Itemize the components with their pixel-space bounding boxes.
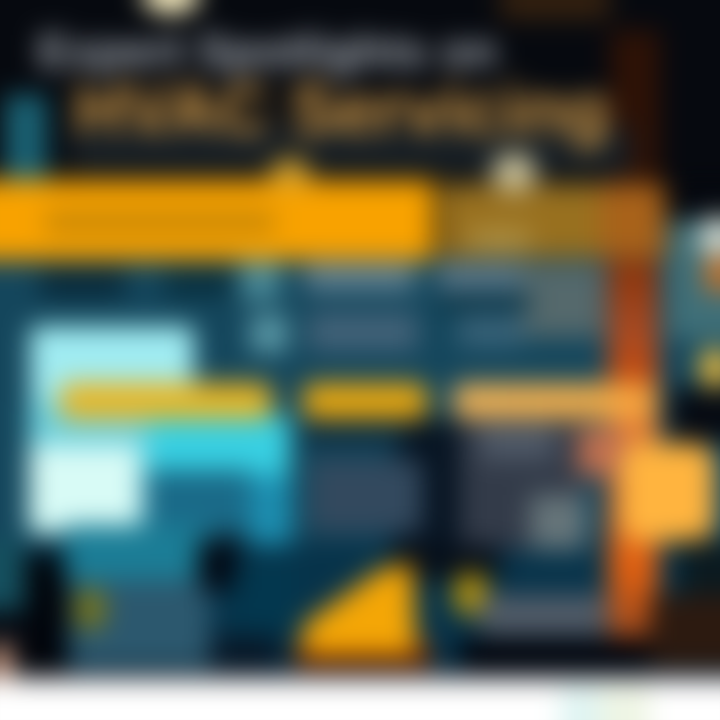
cell slate five xyxy=(458,315,522,347)
marker above gold bar xyxy=(491,152,537,192)
title line two: HVAC Servicing xyxy=(74,71,609,150)
cell slate one xyxy=(305,263,415,291)
footer tint two xyxy=(600,686,650,720)
panel: upper table cells xyxy=(33,247,618,368)
panel: slate-teal lower block xyxy=(70,580,210,668)
panel: teal left edge xyxy=(0,540,25,610)
panel: black band xyxy=(460,638,650,668)
cell slate four xyxy=(308,313,418,351)
panel: teal bridge xyxy=(145,470,250,530)
panel: orange heading bar xyxy=(0,180,434,260)
gold bar orange tail xyxy=(600,184,665,258)
marker above heading bar xyxy=(270,158,310,188)
peach spot at bottom-left xyxy=(0,645,12,681)
icon: olive marker xyxy=(74,588,106,630)
dark-red vertical accent xyxy=(610,30,660,185)
panel: orange callout card xyxy=(620,443,714,542)
panel: orange vertical strip xyxy=(608,260,658,640)
teal glow at left edge xyxy=(5,95,47,185)
panel: black column xyxy=(198,540,240,590)
pill: amber label one xyxy=(60,383,272,419)
cell light one xyxy=(240,261,280,301)
panel: dark-gold heading bar xyxy=(440,184,665,258)
panel: pale cyan card xyxy=(30,446,140,532)
panel: dark navy divider xyxy=(395,420,465,560)
panel: bright cyan card xyxy=(140,415,290,477)
cell light two xyxy=(250,315,288,353)
panel: navy lower xyxy=(210,635,280,667)
panel: slate column center xyxy=(310,460,422,532)
cell dark one xyxy=(40,267,125,297)
panel: dark right block xyxy=(670,388,720,442)
panel: gray band xyxy=(480,595,605,635)
cell dark three xyxy=(440,293,530,311)
panel: dark area right bottom xyxy=(390,545,500,580)
panel: white footer xyxy=(0,678,720,720)
column gray lower xyxy=(530,495,586,550)
panel: header background xyxy=(0,0,720,185)
footer tint one xyxy=(560,686,600,720)
panel: right side teal strip xyxy=(667,220,720,340)
panel: rust base xyxy=(295,640,430,668)
panel: teal bottom-left xyxy=(65,525,210,580)
panel: lower teal background xyxy=(0,540,720,670)
heading bar label xyxy=(45,210,275,234)
panel: black lower-left edge xyxy=(0,610,30,670)
title line one: Expert Spotlights on xyxy=(38,25,498,77)
title xyxy=(22,18,626,166)
panel: mid cyan block xyxy=(28,400,148,535)
panel: main teal table background xyxy=(0,255,720,555)
cell dark two xyxy=(165,267,235,297)
pill: amber label three xyxy=(453,383,657,419)
icon: amber marker xyxy=(454,573,488,615)
panel: dark bottom-left xyxy=(25,555,67,670)
cell slate two xyxy=(438,263,524,291)
panel: dark teal lower xyxy=(305,415,405,445)
panel: brown lower right xyxy=(650,595,720,667)
gold bar spot xyxy=(470,228,530,250)
navy shade behind title xyxy=(70,125,630,175)
brown spot upper right xyxy=(500,0,610,20)
icon: amber dot right xyxy=(698,348,720,388)
orange spot on right strip xyxy=(705,256,720,292)
panel: light cyan card xyxy=(30,326,194,400)
panel: blue-cyan strip xyxy=(248,475,292,545)
panel: dark teal at lower right xyxy=(680,540,720,595)
decorative lamp glow xyxy=(142,0,200,14)
panel: dark teal column xyxy=(235,560,295,660)
panel: salmon block xyxy=(578,428,626,476)
panel: slate column right xyxy=(460,420,585,550)
pill: amber label two xyxy=(303,383,427,419)
pale spot on right strip xyxy=(697,216,720,256)
column lighter area xyxy=(480,425,554,459)
cell slate three xyxy=(520,265,604,337)
